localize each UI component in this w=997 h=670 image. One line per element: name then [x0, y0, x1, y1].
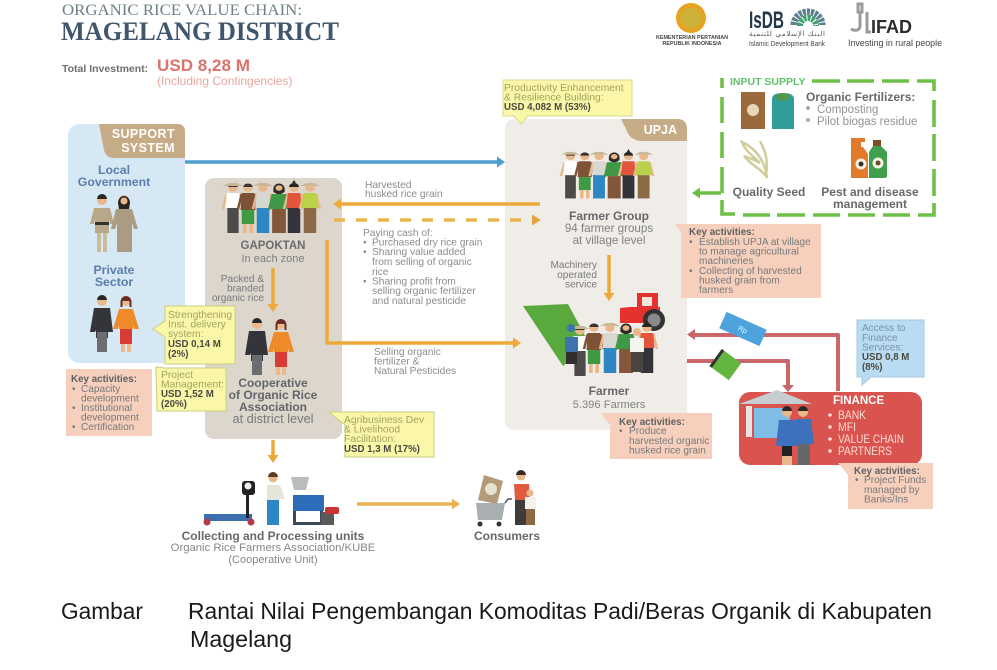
caption: Rantai Nilai Pengembangan Komoditas Padi/Beras Organik di Kabupaten	[188, 598, 932, 624]
callout: strengthening institutions: Strengthening	[168, 310, 232, 321]
callout: key activities support: Institutional	[81, 403, 132, 414]
label: cooperative: at district level	[232, 411, 314, 426]
text: paying cash: Sharing profit from	[372, 276, 456, 288]
callout: key activities UPJA: Collecting of harvested	[699, 266, 802, 277]
callout: key activities finance: Key activities:	[854, 466, 920, 477]
callout: key activities finance: Banks/Ins	[864, 494, 908, 506]
text: paying cash: Paying cash of:	[363, 228, 433, 239]
icon: government officers	[90, 194, 138, 252]
label: packed and branded organic rice	[212, 274, 264, 304]
callout: project management: (20%)	[161, 399, 187, 410]
panel: support system	[68, 124, 185, 363]
label: machinery operated service: operated	[557, 270, 597, 281]
callout: productivity enhancement: USD 4,082 M (53%)	[504, 102, 591, 113]
icon: cooperative couple	[245, 318, 294, 375]
logo: IFAD: IFAD	[871, 17, 912, 37]
text: paying cash: •	[363, 238, 367, 248]
callout: project management: Management:	[161, 380, 224, 390]
callout: access to finance: Finance	[862, 333, 898, 344]
callout: key activities support: development	[81, 412, 139, 424]
label: cooperative	[229, 376, 318, 426]
arrow: packed rice	[268, 268, 278, 312]
callout: key activities support: Capacity	[81, 384, 121, 395]
label: selling organic fertilizer	[374, 347, 456, 377]
arrow: cooperative to processing	[268, 440, 278, 463]
callout: key activities farmer: Key activities:	[619, 417, 685, 428]
callout: key activities UPJA: to manage agricultural	[699, 246, 799, 258]
total investment: USD 8,28 M	[157, 57, 250, 75]
icon: money note: Rp	[737, 325, 748, 335]
logo: IFAD	[848, 4, 942, 49]
text: paying cash: •	[363, 276, 367, 288]
logo: IsDB: Islamic Development Bank	[749, 39, 825, 48]
title: MAGELANG DISTRICT	[61, 17, 339, 46]
callout: key activities support: Key activities:	[71, 374, 137, 385]
icon: money note	[719, 312, 767, 346]
text: organic fertilizers: Organic Fertilizers:	[806, 90, 915, 104]
icon: fertilizer sacks	[741, 92, 794, 129]
text: paying cash: and natural pesticide	[372, 296, 466, 307]
callout: agribusiness	[329, 412, 434, 457]
total investment: (Including Contingencies)	[157, 74, 292, 88]
icon: rice stalk	[742, 141, 767, 178]
label: cooperative: of Organic Rice	[229, 388, 318, 402]
callout: productivity enhancement	[503, 80, 632, 124]
callout: key activities UPJA: Establish UPJA at village	[699, 237, 811, 248]
label: selling organic fertilizer: Selling organic	[374, 347, 441, 358]
callout: project management: USD 1,52 M	[161, 389, 214, 400]
callout: key activities support: •	[72, 384, 76, 395]
icon: green notebook	[709, 349, 741, 380]
text: finance list: MFI	[838, 422, 856, 434]
text: paying cash: rice	[372, 267, 389, 278]
label: farmer: 5.396 Farmers	[573, 399, 646, 411]
callout: access to finance: (8%)	[862, 362, 882, 373]
panel: gapoktan and cooperative	[205, 178, 342, 439]
logo: IsDB: IsDB	[749, 7, 784, 34]
callout: access to finance: USD 0,8 M	[862, 352, 909, 363]
text: paying cash: •	[363, 247, 367, 258]
heading: input supply: INPUT SUPPLY	[730, 76, 805, 88]
label: machinery operated service	[550, 260, 598, 290]
heading: local government: Local	[98, 163, 130, 177]
label: quality seed: Quality Seed	[733, 185, 805, 199]
callout: key activities support: Certification	[81, 422, 134, 433]
label: collecting and processing units: Collecting and Processing units	[182, 529, 365, 543]
callout: strengthening institutions: Inst. delivery	[168, 320, 227, 330]
label: packed and branded organic rice: organic rice	[212, 293, 264, 304]
caption: Gambar	[61, 598, 143, 624]
icon: collecting and processing units	[204, 472, 339, 526]
arrow: selling fertilizer and pesticides	[327, 240, 521, 348]
caption: Magelang	[190, 626, 292, 652]
callout: key activities support: •	[72, 422, 76, 433]
heading: local government: Government	[78, 175, 150, 189]
callout: key activities support: •	[72, 403, 76, 414]
callout: key activities UPJA: •	[689, 237, 693, 248]
logo: ministry of agriculture: KEMENTERIAN PERTANIAN	[656, 35, 728, 41]
text: finance list: VALUE CHAIN	[838, 434, 904, 446]
label: pest and disease management: Pest and disease	[821, 185, 919, 199]
text: finance list: PARTNERS	[838, 446, 892, 458]
text: paying cash: Purchased dry rice grain	[372, 238, 482, 248]
heading: private sector: Private	[93, 263, 135, 277]
logo: ministry of agriculture: REPUBLIK INDONESIA	[662, 41, 722, 47]
callout: access to finance: Access to	[862, 323, 906, 334]
text: paying cash: Sharing value added	[372, 247, 466, 258]
callout: key activities finance	[838, 463, 933, 509]
text: paying cash: selling organic fertilizer	[372, 286, 476, 297]
label: gapoktan: In each zone	[242, 253, 304, 265]
callout: key activities farmer: •	[619, 426, 623, 437]
label: gapoktan: GAPOKTAN	[241, 240, 305, 252]
label: pest and disease management: management	[833, 197, 907, 211]
label: packed and branded organic rice: Packed &	[221, 274, 264, 285]
panel: UPJA	[505, 119, 687, 430]
tab: UPJA: UPJA	[644, 123, 677, 137]
text: paying cash: from selling of organic	[372, 257, 472, 268]
label: harvested husked rice grain: husked rice grain	[365, 189, 443, 200]
label: harvested husked rice grain	[365, 180, 443, 200]
label: machinery operated service: service	[565, 280, 597, 290]
icon: farmers with crops and tractor	[523, 293, 665, 376]
label: cooperative: Association	[239, 400, 307, 414]
label: farmer group	[565, 209, 653, 247]
callout: key activities farmer: Produce	[629, 426, 667, 437]
callout: key activities farmer: husked rice grain	[629, 446, 706, 456]
callout: productivity enhancement: Productivity Enhancement	[504, 83, 624, 94]
logo: IsDB: البنك الإسلامي للتنمية	[749, 30, 825, 38]
title	[61, 2, 339, 46]
callout: project management	[156, 367, 226, 411]
tab: support system: SYSTEM	[121, 141, 175, 155]
callout: key activities UPJA: •	[689, 266, 693, 277]
title: ORGANIC RICE VALUE CHAIN:	[62, 2, 302, 19]
icon: farmer group	[561, 149, 653, 198]
label: farmer: Farmer	[589, 384, 630, 398]
label: cooperative: Cooperative	[238, 376, 308, 390]
callout: key activities UPJA: farmers	[699, 285, 733, 296]
text: finance list: BANK	[838, 410, 866, 422]
label: machinery operated service: Machinery	[550, 260, 598, 271]
panel: input supply	[722, 76, 934, 215]
callout: strengthening institutions: (2%)	[168, 349, 188, 360]
blue arrow: support system to UPJA	[185, 156, 505, 168]
label: consumers: Consumers	[474, 529, 540, 543]
tab: UPJA	[621, 119, 687, 141]
callout: project management: Project	[161, 370, 193, 381]
label: gapoktan	[241, 240, 305, 265]
arrow: processing to consumers	[357, 498, 460, 510]
label: farmer group: Farmer Group	[569, 209, 649, 223]
callout: key activities UPJA: Key activities:	[689, 227, 755, 238]
callout: agribusiness: Agribusiness Dev	[344, 415, 425, 426]
label: selling organic fertilizer: fertilizer &	[374, 356, 419, 368]
arrow: machinery service	[604, 255, 614, 301]
callout: key activities finance: managed by	[864, 485, 921, 496]
callout: agribusiness: Facilitation:	[344, 434, 396, 445]
callout: agribusiness: USD 1,3 M (17%)	[344, 444, 420, 455]
callout: key activities support: development	[81, 394, 139, 404]
label: farmer group: at village level	[573, 234, 645, 247]
logo: IsDB	[749, 7, 825, 48]
icon: consumers	[476, 470, 536, 526]
text: paying cash	[363, 228, 482, 307]
icon: gapoktan farmers	[223, 180, 320, 233]
label: farmer	[573, 384, 646, 411]
callout: key activities finance: Project Funds	[864, 475, 926, 486]
label: collecting and processing units: (Cooperative Unit)	[228, 554, 318, 566]
icon: private sector couple	[90, 295, 139, 352]
callout: key activities UPJA: machineries	[699, 256, 753, 267]
arrow: finance to farmer	[687, 329, 838, 391]
tab: support system: SUPPORT	[112, 127, 175, 141]
icon: bank with staff	[739, 390, 814, 465]
icon: pest bottles	[851, 138, 887, 178]
label: collecting and processing units	[171, 529, 376, 566]
callout: access to finance	[857, 320, 924, 385]
heading: private sector	[93, 263, 135, 289]
label: pest and disease management	[821, 185, 919, 211]
callout: key activities support	[66, 369, 152, 436]
callout: agribusiness: & Livelihood	[344, 424, 400, 436]
total investment	[62, 57, 292, 88]
callout: key activities farmer: harvested organic	[629, 436, 709, 447]
callout: productivity enhancement: & Resilience Building:	[504, 92, 604, 104]
arrow: input supply	[692, 188, 721, 198]
infographic	[61, 2, 942, 566]
logo: ministry of agriculture	[656, 3, 728, 47]
callout: strengthening institutions	[153, 306, 235, 364]
text: organic fertilizers	[806, 90, 917, 128]
text: finance list	[828, 395, 904, 458]
callout: key activities farmer	[601, 413, 712, 459]
callout: strengthening institutions: USD 0,14 M	[168, 339, 221, 350]
text: organic fertilizers: Pilot biogas residue	[817, 116, 917, 128]
arrow: farmer to finance	[687, 361, 794, 392]
callout: key activities UPJA: husked grain from	[699, 276, 780, 286]
text: finance list: FINANCE	[833, 395, 884, 407]
callout: key activities UPJA	[675, 224, 821, 298]
panel: finance	[739, 390, 922, 465]
label: harvested husked rice grain: Harvested	[365, 180, 412, 191]
text: organic fertilizers: Composting	[817, 104, 878, 116]
label: farmer group: 94 farmer groups	[565, 222, 653, 235]
arrow: harvested grain	[333, 198, 540, 210]
logo: IFAD: Investing in rural people	[848, 38, 942, 49]
label: packed and branded organic rice: branded	[227, 284, 264, 294]
label: selling organic fertilizer: Natural Pesticides	[374, 366, 456, 377]
arrow: paying cash dashed	[334, 214, 541, 226]
heading: local government	[78, 163, 150, 189]
total investment: Total Investment:	[62, 63, 148, 75]
label: collecting and processing units: Organic Rice Farmers Association/KUBE	[171, 542, 376, 554]
callout: key activities finance: •	[855, 475, 859, 486]
callout: strengthening institutions: system:	[168, 329, 203, 340]
caption	[61, 598, 932, 652]
tab: support system	[99, 124, 185, 158]
callout: access to finance: Services:	[862, 342, 903, 354]
heading: private sector: Sector	[95, 275, 133, 289]
